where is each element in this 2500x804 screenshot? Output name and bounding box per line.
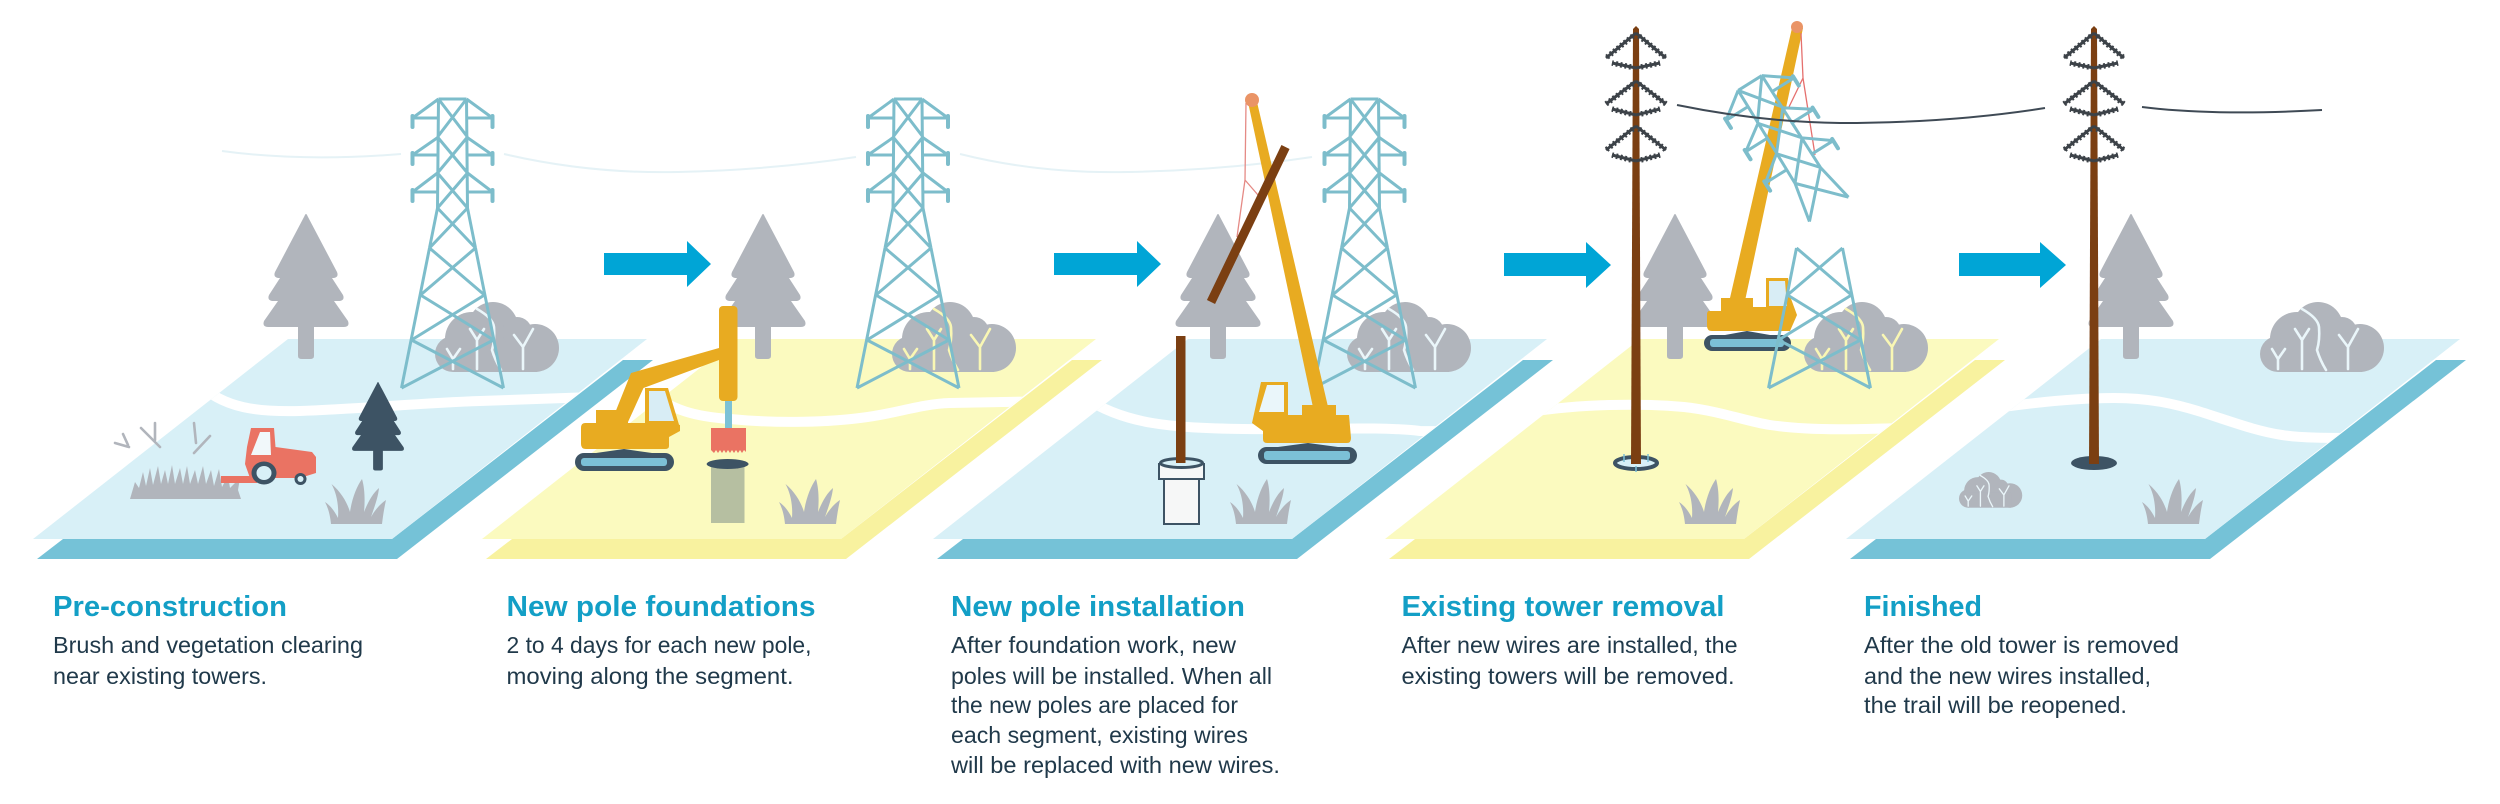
icon: drill rod and bit xyxy=(711,400,746,453)
arrow 3 xyxy=(1504,242,1611,288)
icon: grass xyxy=(1230,479,1291,524)
icon: bush xyxy=(2260,302,2384,372)
icon: hole rim xyxy=(707,459,749,469)
text: finished xyxy=(1864,591,2179,718)
icon: crane xyxy=(1237,93,1357,464)
heading: New pole installation xyxy=(951,591,1245,623)
icon: new pole with insulators xyxy=(1606,26,1666,464)
icon: removed tower top being lifted xyxy=(1716,62,1863,231)
arrow 2 xyxy=(1054,241,1161,287)
icon: pole base ring xyxy=(1615,454,1657,472)
description: poles will be installed. When all xyxy=(951,663,1272,689)
icon: standing new pole xyxy=(1176,336,1186,463)
icon: bush xyxy=(1347,302,1471,372)
icon: background tree xyxy=(720,214,806,359)
icon: grass xyxy=(779,479,840,524)
icon: grass xyxy=(325,479,386,524)
description xyxy=(950,632,1280,778)
icon: pole base xyxy=(2071,456,2117,470)
new wires xyxy=(1677,105,2322,123)
ground layers xyxy=(33,339,653,559)
ground layers xyxy=(482,339,1102,559)
icon: background tree xyxy=(1176,214,1260,359)
description: Brush and vegetation clearing xyxy=(53,632,363,658)
heading: New pole foundations xyxy=(506,591,816,623)
text: pre-construction xyxy=(53,591,363,689)
icon: grass xyxy=(1679,479,1740,524)
trail xyxy=(1530,405,1960,429)
icon: lattice tower xyxy=(1314,99,1416,388)
panel: new pole installation xyxy=(933,93,1553,559)
description: After foundation work, new xyxy=(951,632,1237,658)
heading: Pre-construction xyxy=(53,591,287,623)
panel: existing tower removal xyxy=(1385,21,2322,559)
description: near existing towers. xyxy=(53,663,267,689)
heading: Finished xyxy=(1864,591,1982,623)
faint wires xyxy=(222,151,1312,172)
text: new pole foundations xyxy=(506,591,816,689)
icon: small bush xyxy=(1959,472,2022,508)
icon: concrete foundation xyxy=(1159,458,1204,524)
description: 2 to 4 days for each new pole, xyxy=(506,632,812,658)
icon: background tree xyxy=(2088,214,2174,359)
icon: brush patch xyxy=(130,465,241,499)
panel: finished xyxy=(1846,26,2466,559)
trail xyxy=(1990,398,2400,438)
icon: lattice tower xyxy=(857,99,959,388)
icon: background tree xyxy=(1632,214,1718,359)
icon: flying twigs xyxy=(115,423,210,453)
arrow 1 xyxy=(604,241,711,287)
description: After new wires are installed, the xyxy=(1402,632,1738,658)
description: existing towers will be removed. xyxy=(1402,663,1734,689)
panel: new pole foundations xyxy=(482,99,1102,559)
icon: lattice tower xyxy=(402,99,504,388)
icon: crawler crane xyxy=(1704,21,1815,351)
icon: tower base remaining xyxy=(1768,248,1870,388)
description: and the new wires installed, xyxy=(1864,663,2151,689)
icon: bush xyxy=(892,302,1016,372)
icon: red brush-clearing tractor xyxy=(221,428,316,485)
description: the trail will be reopened. xyxy=(1864,692,2127,718)
icon: bush xyxy=(1804,302,1928,372)
icon: bush xyxy=(435,302,559,372)
arrow 4 xyxy=(1959,242,2066,288)
heading: Existing tower removal xyxy=(1402,591,1724,623)
icon: excavator xyxy=(575,306,738,471)
description: will be replaced with new wires. xyxy=(950,752,1280,778)
panel: pre-construction xyxy=(33,99,1312,559)
icon: finished pole with insulators xyxy=(2064,26,2124,464)
ground layers xyxy=(933,339,1553,559)
text: new pole installation xyxy=(950,591,1280,778)
trail xyxy=(1097,404,1436,436)
icon: background tree xyxy=(264,214,348,359)
icon: grass xyxy=(2142,479,2203,524)
ground layers xyxy=(1846,339,2466,559)
icon: dark tree xyxy=(352,382,404,470)
description: each segment, existing wires xyxy=(951,722,1248,748)
text: existing tower removal xyxy=(1402,591,1738,689)
description xyxy=(1864,632,2179,718)
description xyxy=(506,632,812,689)
description: moving along the segment. xyxy=(506,663,794,689)
description: After the old tower is removed xyxy=(1864,632,2179,658)
trail xyxy=(672,396,1022,427)
description: the new poles are placed for xyxy=(951,692,1238,718)
icon: column in ground xyxy=(711,467,744,523)
description xyxy=(53,632,363,689)
description xyxy=(1402,632,1738,689)
icon: new pole being lifted xyxy=(1211,147,1286,302)
trail xyxy=(211,392,578,416)
ground layers xyxy=(1385,339,2005,559)
